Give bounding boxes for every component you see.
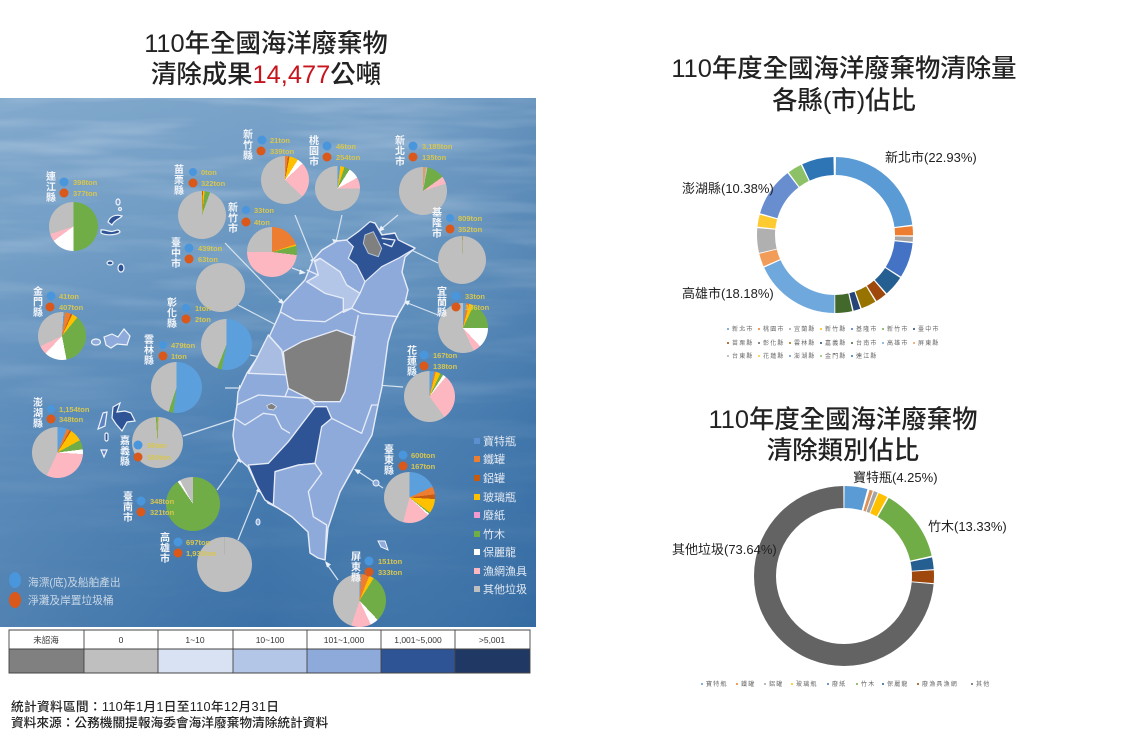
name: 新: [228, 201, 238, 214]
text block: data period and source: 資料來源：公務機關提報海委會海洋廢棄物清除統計資料: [11, 715, 328, 730]
legend: 桃園市: [763, 325, 785, 333]
county: New Taipei: [395, 134, 453, 215]
sea background: [0, 98, 536, 627]
icons: [420, 350, 428, 370]
legend: waste source: 海漂(底)及船舶產出: [28, 576, 121, 589]
tons: 138ton: [433, 362, 458, 371]
name: 栗: [174, 174, 184, 186]
name: 縣: [437, 306, 447, 319]
icons: [408, 142, 418, 162]
legend: 連江縣: [856, 352, 878, 360]
name: 臺: [384, 443, 394, 456]
icons: [136, 496, 146, 516]
name: 縣: [120, 455, 130, 468]
name: 市: [309, 155, 319, 168]
tons: 697ton: [186, 538, 211, 547]
ring segments: [766, 166, 904, 304]
data labels: 新北市(22.93%): [885, 150, 977, 165]
icons: [184, 244, 194, 264]
county: Kinmen: [33, 285, 86, 360]
tons: 3,185ton: [422, 142, 453, 151]
tons: 352ton: [458, 225, 483, 234]
pie: [399, 167, 447, 215]
pie: [404, 370, 454, 422]
legend: 新竹縣: [825, 325, 847, 333]
Taipei City: [363, 232, 382, 257]
tons: 167ton: [433, 351, 458, 360]
Hsinchu County: [307, 258, 360, 312]
title: left heading: 110年全國海洋廢棄物: [144, 30, 388, 58]
name: 市: [395, 155, 405, 168]
tons: 21ton: [270, 136, 290, 145]
name: 基: [432, 206, 442, 219]
name: 湖: [33, 406, 43, 420]
county: Changhua: [167, 296, 252, 370]
tons: 0ton: [201, 168, 217, 177]
county: Yilan: [437, 285, 490, 353]
legend: waste types: 漁網漁具: [483, 564, 527, 578]
table: color scale legend: 0: [119, 635, 124, 645]
Kaohsiung City: [248, 407, 332, 505]
county: Hualien: [404, 344, 458, 422]
tons: 322ton: [201, 179, 226, 188]
Chiayi City: [267, 403, 277, 410]
pie: [150, 362, 202, 412]
donut chart: category share: 竹木(13.33%): [928, 519, 1007, 534]
icons: [174, 538, 182, 558]
table: color scale legend: 10~100: [256, 635, 285, 645]
legend: waste types: 鐵罐: [483, 452, 505, 466]
icons: [364, 556, 374, 576]
tons: 407ton: [59, 303, 84, 312]
pie: [332, 574, 386, 626]
name: 金: [33, 285, 43, 298]
tons: 348ton: [59, 415, 84, 424]
tons: 254ton: [336, 153, 361, 162]
name: 桃: [309, 134, 319, 147]
name: 彰: [167, 296, 177, 309]
name: 花: [407, 344, 417, 357]
county borders south: [235, 388, 378, 560]
ring segments: [765, 497, 923, 655]
tons: 167ton: [411, 462, 436, 471]
Changhua County: [248, 335, 290, 375]
name: 高: [160, 531, 170, 544]
tons: 1ton: [171, 352, 187, 361]
name: 臺: [171, 236, 181, 249]
main island outline: [233, 222, 415, 560]
county: Lienchiang: [46, 170, 98, 250]
name: 新: [395, 134, 405, 147]
tons: 136ton: [465, 303, 490, 312]
pie: [38, 312, 86, 360]
name: 縣: [243, 149, 253, 162]
name: 蘭: [437, 296, 447, 308]
name: 竹: [228, 212, 238, 224]
county: Penghu: [32, 396, 90, 478]
county: Hsinchu County: [243, 128, 309, 204]
title: county share: 110年度全國海洋廢棄物清除量: [671, 55, 1017, 83]
name: 市: [171, 257, 181, 270]
county: Keelung: [432, 206, 486, 284]
title: county share: 各縣(市)佔比: [772, 87, 916, 115]
icons: [446, 214, 454, 234]
tons: 377ton: [73, 189, 98, 198]
legend: [727, 325, 940, 360]
legend: 保麗龍: [887, 680, 909, 688]
legend: 廢漁具漁網: [922, 680, 958, 688]
table: color scale legend: 1,001~5,000: [394, 635, 442, 645]
legend: 金門縣: [825, 352, 847, 360]
name: 苗: [174, 163, 184, 176]
county: Taichung: [171, 236, 244, 312]
legend: 苗栗縣: [732, 339, 754, 347]
county: Taitung: [384, 443, 436, 522]
legend: waste source: [9, 572, 121, 608]
legend: 雲林縣: [794, 339, 816, 347]
name: 市: [160, 552, 170, 565]
islands: Kinmen: [92, 329, 130, 348]
name: 縣: [174, 184, 184, 197]
Nantou County: [283, 330, 355, 402]
tons: 580ton: [147, 453, 172, 462]
tons: 1ton: [195, 304, 211, 313]
tons: 63ton: [198, 255, 218, 264]
county borders north: [268, 238, 398, 375]
pie: [132, 416, 182, 468]
name: 縣: [384, 464, 394, 477]
legend: 竹木: [861, 680, 875, 688]
panel: sea map: [0, 98, 536, 627]
data labels: 寶特瓶(4.25%): [853, 470, 938, 485]
icons: [60, 178, 68, 198]
title: category share: 清除類別佔比: [767, 437, 919, 465]
name: 臺: [123, 490, 133, 503]
pie: [438, 236, 486, 284]
name: 蓮: [407, 354, 417, 368]
tons: 1,154ton: [59, 405, 90, 414]
pie: [166, 477, 220, 531]
name: 雄: [160, 542, 170, 554]
legend: 澎湖縣: [794, 352, 816, 360]
table: color scale legend: 101~1,000: [324, 635, 364, 645]
icons: [452, 292, 460, 312]
legend: [701, 680, 990, 688]
tons: 398ton: [73, 178, 98, 187]
text block: data period and source: 統計資料區間：110年1月1日至110年12月31日: [11, 699, 279, 714]
legend: 屏東縣: [918, 339, 940, 347]
pie: [48, 202, 98, 250]
pie: [178, 191, 226, 239]
title: category share: 110年度全國海洋廢棄物: [708, 406, 978, 434]
table: color scale legend: 1~10: [185, 635, 205, 645]
county: Chiayi: [120, 416, 182, 468]
tons: 4ton: [254, 218, 270, 227]
legend: waste types: 鋁罐: [483, 471, 505, 485]
legend: 台東縣: [732, 352, 754, 360]
icons: [158, 341, 168, 360]
name: 縣: [33, 306, 43, 319]
tons: 33ton: [254, 206, 274, 215]
pie: [384, 472, 434, 522]
pie: [196, 536, 252, 592]
icons: [322, 142, 332, 162]
tons: 809ton: [458, 214, 483, 223]
legend: waste types: 寶特瓶: [483, 434, 516, 448]
New Taipei City: [347, 222, 415, 282]
name: 林: [144, 344, 154, 356]
name: 隆: [432, 216, 442, 230]
title: left heading: 清除成果14,477公噸: [151, 61, 381, 89]
legend: 臺中市: [918, 325, 940, 333]
name: 東: [351, 560, 361, 574]
pie: [261, 156, 309, 204]
tons: 439ton: [198, 244, 223, 253]
table: color scale legend: 未詔海: [33, 635, 59, 645]
icons: [188, 168, 198, 188]
legend: 宜蘭縣: [794, 325, 816, 333]
tons: 479ton: [171, 341, 196, 350]
donut chart: county share: 高雄市(18.18%): [682, 286, 774, 301]
legend: 台南市: [856, 339, 878, 347]
icons: [398, 450, 408, 470]
name: 縣: [167, 317, 177, 330]
name: 屏: [351, 551, 361, 563]
name: 縣: [33, 417, 43, 430]
pie: [314, 166, 360, 210]
icons: [256, 136, 266, 156]
tons: 33ton: [465, 292, 485, 301]
donut chart: category share: 其他垃圾(73.64%): [672, 542, 777, 557]
pie: [438, 303, 488, 353]
tons: 339ton: [270, 147, 295, 156]
name: 南: [123, 500, 133, 514]
legend: waste types: 玻璃瓶: [483, 490, 516, 504]
name: 縣: [351, 571, 361, 584]
legend: 玻璃瓶: [796, 680, 818, 688]
name: 園: [309, 146, 319, 158]
tons: 46ton: [336, 142, 356, 151]
pie: [200, 318, 252, 370]
pie: [247, 227, 297, 277]
legend: 鋁罐: [769, 680, 783, 688]
legend: 鐵罐: [741, 680, 755, 688]
tons: 321ton: [150, 508, 175, 517]
legend: 其他: [976, 680, 990, 688]
pie: [196, 262, 244, 312]
islands: Liuqiu, Green Island and Orchid Island: [256, 480, 388, 550]
icons: [46, 405, 56, 424]
tons: 1,935ton: [186, 549, 217, 558]
icons: [46, 292, 56, 312]
pie: [32, 426, 82, 478]
name: 市: [432, 227, 442, 240]
legend: 彰化縣: [763, 339, 785, 347]
legend: waste types: 其他垃圾: [483, 582, 527, 596]
tons: 135ton: [422, 153, 447, 162]
icons: [134, 440, 142, 462]
name: 澎: [33, 396, 43, 409]
tons: 151ton: [378, 557, 403, 566]
name: 竹: [243, 138, 253, 152]
legend: waste types: 廢紙: [483, 508, 505, 522]
name: 市: [228, 222, 238, 235]
legend: 花蓮縣: [763, 352, 785, 360]
legend: 基隆市: [856, 325, 878, 333]
name: 連: [46, 170, 56, 183]
donut chart: county share: 澎湖縣(10.38%): [682, 181, 774, 196]
legend: waste types: [474, 434, 527, 596]
legend: waste types: 保麗龍: [483, 545, 516, 559]
legend: 嘉義縣: [825, 339, 847, 347]
islands: Matsu: [101, 199, 124, 272]
county: Yunlin: [144, 334, 202, 412]
county: Pingtung: [332, 551, 403, 626]
county: Hsinchu City: [228, 201, 297, 277]
name: 嘉: [120, 434, 130, 447]
name: 義: [120, 444, 130, 458]
name: 縣: [407, 365, 417, 378]
icons: [242, 206, 250, 226]
name: 新: [243, 128, 253, 141]
tons: 41ton: [59, 292, 79, 301]
legend: waste types: 竹木: [483, 527, 505, 541]
map: Taiwan counties: [233, 222, 415, 560]
legend: waste source: 淨灘及岸置垃圾桶: [28, 594, 114, 607]
county: Kaohsiung: [160, 531, 252, 592]
legend: 高雄市: [887, 339, 909, 347]
name: 北: [395, 146, 405, 158]
donut chart: county share: [682, 150, 977, 360]
tons: 2ton: [195, 315, 211, 324]
name: 市: [123, 511, 133, 524]
legend: 寶特瓶: [706, 680, 728, 688]
county: Miaoli: [174, 163, 226, 239]
tons: 96ton: [147, 441, 167, 450]
icons: [182, 304, 190, 324]
tons: 348ton: [150, 497, 175, 506]
county: Tainan: [123, 477, 220, 531]
legend: 廢紙: [832, 680, 846, 688]
name: 縣: [46, 191, 56, 204]
name: 江: [46, 180, 56, 194]
table: color scale legend: [9, 630, 530, 673]
name: 雲: [144, 334, 154, 346]
legend: 新北市: [732, 325, 754, 333]
donut chart: category share: [672, 470, 1007, 688]
name: 縣: [144, 354, 154, 367]
legend: 新竹市: [887, 325, 909, 333]
tons: 333ton: [378, 568, 403, 577]
table: color scale legend: >5,001: [479, 635, 505, 645]
name: 東: [384, 454, 394, 466]
name: 門: [33, 296, 43, 308]
county: Taoyuan: [309, 134, 361, 210]
name: 中: [171, 246, 181, 260]
islands: Penghu: [98, 403, 135, 457]
arrows: counties to map: [183, 215, 438, 580]
tons: 600ton: [411, 451, 436, 460]
name: 宜: [437, 285, 447, 298]
name: 化: [167, 306, 177, 320]
